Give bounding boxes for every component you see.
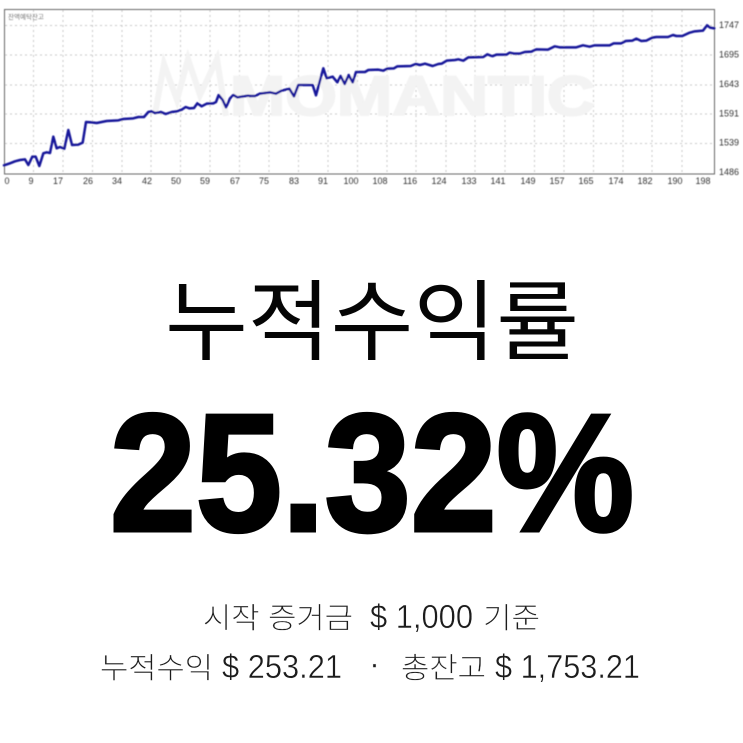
y axis labels: 1539 <box>719 138 739 148</box>
text: cumulative profit and total balance: $ 253.21 <box>222 648 342 685</box>
y axis labels: 1747 <box>719 20 739 30</box>
text: cumulative profit and total balance: $ 1,753.21 <box>495 648 640 685</box>
y axis labels: 1695 <box>719 50 739 60</box>
x axis labels: 198 <box>695 176 711 186</box>
x axis labels: 75 <box>259 176 269 186</box>
x axis labels: 26 <box>83 176 93 186</box>
text: cumulative profit and total balance <box>100 645 640 687</box>
x axis labels: 182 <box>637 176 653 186</box>
text: cumulative profit and total balance: 누적수익 <box>100 645 213 687</box>
watermark: MOMANTIC: MOMANTIC <box>230 64 595 127</box>
x axis labels: 67 <box>230 176 240 186</box>
x axis labels: 165 <box>578 176 594 186</box>
text: starting margin: 시작 증거금 <box>203 595 353 637</box>
text: starting margin: $ 1,000 <box>370 598 473 635</box>
x axis labels: 50 <box>171 176 181 186</box>
x axis labels: 133 <box>461 176 477 186</box>
x axis labels: 0 <box>4 176 10 186</box>
x axis labels: 9 <box>28 176 34 186</box>
main figure: 25.32% <box>110 380 634 566</box>
x axis labels: 190 <box>667 176 683 186</box>
text: cumulative profit and total balance: · <box>369 645 380 682</box>
heading: 누적수익률 <box>165 252 579 379</box>
x axis labels: 59 <box>200 176 210 186</box>
y axis labels <box>719 20 739 177</box>
x axis labels: 141 <box>490 176 506 186</box>
x axis labels: 34 <box>112 176 122 186</box>
y axis labels: 1643 <box>719 79 739 89</box>
chart legend label: 잔액예탁잔고 <box>8 12 44 21</box>
x axis labels: 149 <box>520 176 536 186</box>
y axis labels: 1591 <box>719 108 739 118</box>
x axis labels: 174 <box>608 176 624 186</box>
text: cumulative profit and total balance: 총잔고 <box>401 645 486 687</box>
text: starting margin: 기준 <box>483 595 540 637</box>
x axis labels: 116 <box>403 176 417 186</box>
y axis labels: 1486 <box>719 167 739 177</box>
x axis labels: 108 <box>372 176 388 186</box>
x axis labels <box>4 176 711 186</box>
x axis labels: 42 <box>142 176 152 186</box>
x axis labels: 17 <box>53 176 63 186</box>
panel: equity line chart <box>4 10 739 186</box>
x axis labels: 83 <box>289 176 299 186</box>
x axis labels: 91 <box>318 176 328 186</box>
chart frame <box>4 10 714 174</box>
x axis labels: 100 <box>343 176 359 186</box>
x axis labels: 157 <box>549 176 565 186</box>
x axis labels: 124 <box>431 176 447 186</box>
text: starting margin <box>203 595 540 637</box>
watermark: MOMANTIC <box>155 59 595 127</box>
equity curve <box>4 25 714 166</box>
